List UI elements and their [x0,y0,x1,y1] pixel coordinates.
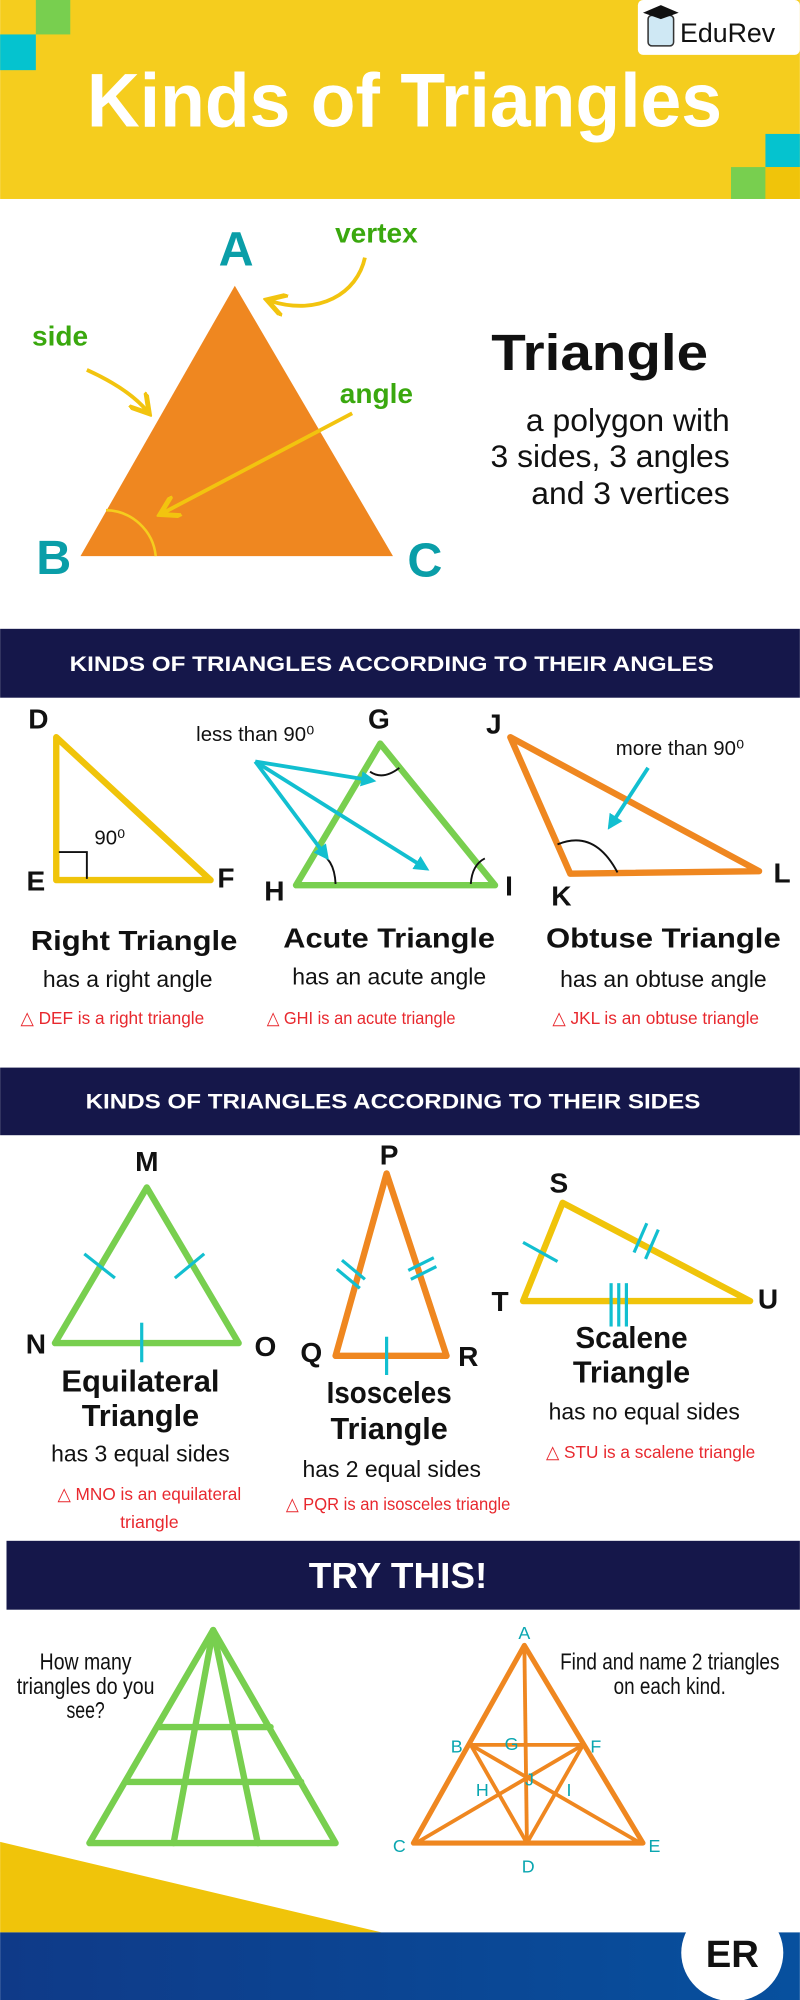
band: angles [0,629,800,698]
question text [17,1649,154,1723]
puzzle: orange triangle: J [525,1770,534,1790]
captions: sides: has 3 equal sides [51,1441,230,1467]
main triangle diagram: vertex [335,217,418,248]
obtuse triangle: more than 90⁰ [616,738,744,760]
captions: angles: △ GHI is an acute triangle [267,1008,456,1028]
right triangle: F [217,863,234,894]
main triangle diagram: C [407,534,442,588]
acute triangle: G [368,703,390,734]
equilateral triangle [26,1146,276,1362]
captions: sides: triangle [120,1512,179,1532]
equilateral triangle: O [255,1331,276,1362]
captions: sides: Triangle [330,1412,448,1446]
captions: angles: has a right angle [43,966,212,992]
obtuse triangle [486,708,791,912]
band: sides: KINDS OF TRIANGLES ACCORDING TO THEIR SIDES [86,1088,700,1113]
instruction text: on each kind. [614,1673,726,1699]
puzzle: orange triangle: F [590,1737,601,1757]
captions: angles: has an acute angle [292,964,486,990]
main triangle diagram: A [219,222,254,276]
isosceles triangle: R [458,1341,478,1372]
scalene triangle: T [492,1286,509,1317]
captions: angles [21,923,781,1028]
puzzle: orange triangle: H [476,1780,489,1800]
captions: sides [51,1321,755,1532]
equilateral triangle: M [135,1146,158,1177]
isosceles triangle [300,1140,478,1375]
captions: sides: Triangle [82,1399,199,1433]
puzzle: orange triangle: C [393,1836,406,1856]
obtuse triangle: J [486,708,502,739]
captions: sides: has no equal sides [549,1399,740,1425]
captions: angles: Right Triangle [31,925,237,956]
right triangle: 90⁰ [94,827,125,849]
captions: sides: △ MNO is an equilateral [58,1484,241,1504]
puzzle: orange triangle: G [505,1734,519,1754]
captions: angles: △ JKL is an obtuse triangle [552,1008,759,1028]
question text: triangles do you [17,1673,154,1699]
definition text: Triangle [491,324,708,381]
obtuse triangle: K [551,881,571,912]
right triangle: E [26,865,45,896]
scalene triangle: S [549,1168,568,1199]
captions: sides: Equilateral [61,1365,220,1399]
main triangle diagram [32,217,442,588]
band: try this: TRY THIS! [309,1556,487,1596]
captions: sides: △ STU is a scalene triangle [546,1442,755,1462]
scalene triangle [492,1168,778,1327]
puzzle: green triangle [89,1630,336,1843]
instruction text [560,1649,779,1699]
captions: angles: Acute Triangle [283,923,495,954]
isosceles triangle: P [380,1140,399,1171]
main triangle diagram: B [36,531,71,585]
footer band [0,1932,800,2000]
acute triangle: I [505,870,513,901]
definition text: and 3 vertices [531,475,730,511]
band: try this [7,1541,800,1610]
definition text [491,324,730,511]
captions: angles: △ DEF is a right triangle [21,1008,204,1028]
right triangle: D [28,703,49,734]
logo: ER [681,1904,783,2000]
acute triangle: H [264,876,284,907]
captions: sides: Scalene [575,1321,688,1355]
main triangle diagram: angle [340,378,413,409]
main triangle diagram: side [32,321,88,352]
question text: see? [66,1697,105,1723]
yellow wedge [0,1842,382,1932]
puzzle: orange triangle: B [451,1737,463,1757]
puzzle: orange triangle: E [649,1836,661,1856]
title: Kinds of Triangles [87,58,722,143]
captions: angles: has an obtuse angle [560,966,767,992]
captions: sides: has 2 equal sides [302,1456,481,1482]
header band [0,0,800,199]
captions: sides: △ PQR is an isosceles triangle [286,1494,510,1514]
band: sides [0,1068,800,1135]
obtuse triangle: L [773,858,791,889]
equilateral triangle: N [26,1328,46,1359]
right triangle [26,703,234,896]
logo: EduRev [638,0,800,55]
band: angles: KINDS OF TRIANGLES ACCORDING TO THEIR ANGLES [70,651,714,676]
puzzle: orange triangle: I [567,1780,571,1800]
puzzle: orange triangle: A [518,1623,530,1643]
captions: sides: Isosceles [327,1376,452,1410]
question text: How many [40,1649,132,1675]
acute triangle: less than 90⁰ [196,724,314,746]
puzzle: orange triangle [393,1623,661,1876]
captions: sides: Triangle [573,1356,690,1390]
acute triangle [196,703,513,907]
isosceles triangle: Q [300,1337,322,1368]
definition text: 3 sides, 3 angles [491,438,730,474]
logo: ER: ER [706,1933,759,1976]
definition text: a polygon with [526,402,730,438]
captions: angles: Obtuse Triangle [546,923,781,954]
puzzle: orange triangle: D [522,1856,535,1876]
scalene triangle: U [758,1284,778,1315]
logo: EduRev: EduRev [680,18,776,48]
